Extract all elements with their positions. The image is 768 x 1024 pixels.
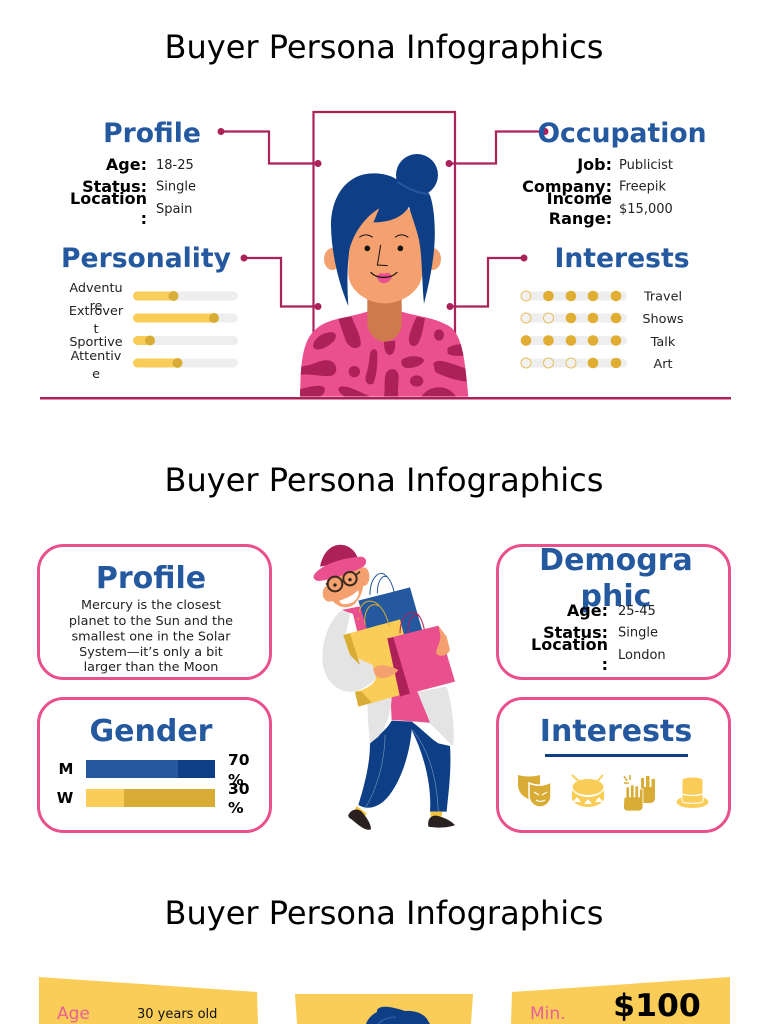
icon: top hat bbox=[676, 777, 708, 808]
occupation fields: Income bbox=[547, 189, 612, 208]
personality labels: t bbox=[93, 322, 99, 337]
body text: planet to the Sun and the bbox=[69, 614, 233, 629]
card: profile bbox=[38, 546, 270, 678]
body text: System—it’s only a bit bbox=[79, 645, 223, 660]
bar: women: W bbox=[57, 789, 74, 807]
frame behind persona bbox=[314, 112, 455, 345]
occupation fields: Job: bbox=[576, 155, 612, 174]
panel: profile bbox=[70, 118, 201, 228]
profile fields: Location bbox=[70, 189, 147, 208]
personality labels bbox=[69, 281, 124, 382]
demographic fields bbox=[531, 601, 666, 674]
bar: men: % bbox=[228, 771, 244, 789]
hair bbox=[366, 1007, 430, 1024]
personality labels: re bbox=[90, 299, 103, 314]
panel: occupation bbox=[522, 118, 707, 228]
bar: men bbox=[59, 751, 250, 789]
rating labels bbox=[642, 290, 684, 372]
panel: personality bbox=[61, 243, 238, 382]
connector: profile bbox=[218, 128, 322, 167]
value: min: $100 bbox=[613, 988, 701, 1024]
icon: drum bbox=[572, 775, 604, 807]
personality sliders bbox=[133, 291, 238, 368]
card: demographic: phic bbox=[581, 579, 651, 614]
heading: personality: Personality bbox=[61, 243, 231, 274]
heading: demographic: Demogra bbox=[539, 543, 693, 578]
bar: men: M bbox=[59, 760, 73, 778]
personality labels: e bbox=[92, 367, 100, 382]
heading: profile: Profile bbox=[103, 118, 201, 149]
rating tracks bbox=[521, 292, 627, 368]
demographic fields: 25-45 bbox=[618, 604, 656, 619]
personality labels: Adventu bbox=[69, 281, 123, 296]
body text: smallest one in the Solar bbox=[71, 630, 231, 644]
underline bbox=[545, 754, 688, 757]
occupation fields: Freepik bbox=[619, 180, 666, 194]
panel: interests ratings bbox=[521, 243, 690, 372]
profile fields: 18-25 bbox=[156, 158, 194, 173]
bar: men: 70 bbox=[228, 751, 250, 769]
panel: budget bbox=[511, 977, 730, 1024]
connector: interests bbox=[446, 254, 528, 310]
title: section 1: Buyer Persona Infographics bbox=[165, 28, 603, 66]
panel: persona portrait bbox=[295, 994, 473, 1024]
rating labels: Art bbox=[653, 357, 673, 372]
title: section 2: Buyer Persona Infographics bbox=[165, 461, 603, 499]
occupation fields: $15,000 bbox=[619, 202, 673, 217]
occupation fields: Range: bbox=[549, 209, 612, 228]
rating labels: Travel bbox=[643, 290, 682, 304]
personality labels: Extrover bbox=[69, 304, 124, 319]
profile fields: : bbox=[141, 209, 147, 228]
profile fields: Single bbox=[156, 180, 196, 194]
rating labels: Shows bbox=[642, 312, 684, 327]
occupation fields: Publicist bbox=[619, 158, 673, 173]
icon: theatre masks bbox=[518, 775, 551, 807]
bar: women bbox=[57, 780, 250, 817]
personality labels: Sportive bbox=[69, 335, 123, 350]
demographic fields: Location bbox=[531, 635, 608, 654]
profile fields bbox=[70, 155, 196, 228]
icon: clapping hands bbox=[624, 775, 655, 811]
heading: occupation: Occupation bbox=[537, 118, 707, 149]
demographic fields: London bbox=[618, 648, 666, 663]
connector: personality bbox=[240, 254, 322, 310]
card: gender bbox=[38, 698, 270, 832]
label: age: Age bbox=[57, 1004, 90, 1024]
rating labels: Talk bbox=[650, 335, 676, 350]
occupation fields: Company: bbox=[522, 177, 612, 196]
title: section 3: Buyer Persona Infographics bbox=[165, 894, 603, 932]
body text: Mercury is the closest bbox=[81, 598, 221, 613]
profile fields: Status: bbox=[82, 177, 147, 196]
illustration: man with shopping bags bbox=[314, 545, 455, 830]
ground line bbox=[40, 397, 731, 400]
demographic fields: Age: bbox=[567, 601, 608, 620]
occupation fields bbox=[522, 155, 673, 228]
heading: interests: Interests bbox=[554, 243, 690, 274]
value: age: 30 years old bbox=[137, 1007, 217, 1022]
profile fields: Age: bbox=[106, 155, 147, 174]
profile fields: Spain bbox=[156, 202, 192, 217]
demographic fields: : bbox=[602, 655, 608, 674]
illustration: woman persona bbox=[297, 154, 470, 397]
demographic fields: Status: bbox=[543, 623, 608, 642]
card: demographic bbox=[498, 543, 730, 678]
panel: age bbox=[39, 977, 258, 1024]
label: min: Min. bbox=[530, 1004, 566, 1024]
personality labels: Attentiv bbox=[71, 349, 122, 364]
connector: occupation bbox=[446, 128, 548, 167]
body text: larger than the Moon bbox=[84, 660, 218, 675]
demographic fields: Single bbox=[618, 626, 658, 640]
bar: women: 30 bbox=[228, 780, 250, 798]
rating dots bbox=[521, 291, 621, 368]
heading: gender: Gender bbox=[90, 714, 213, 749]
heading: profile: Profile bbox=[96, 561, 206, 596]
heading: interests: Interests bbox=[540, 714, 692, 749]
bar: women: % bbox=[228, 799, 244, 817]
card: interests bbox=[498, 698, 730, 832]
body text bbox=[69, 598, 233, 675]
